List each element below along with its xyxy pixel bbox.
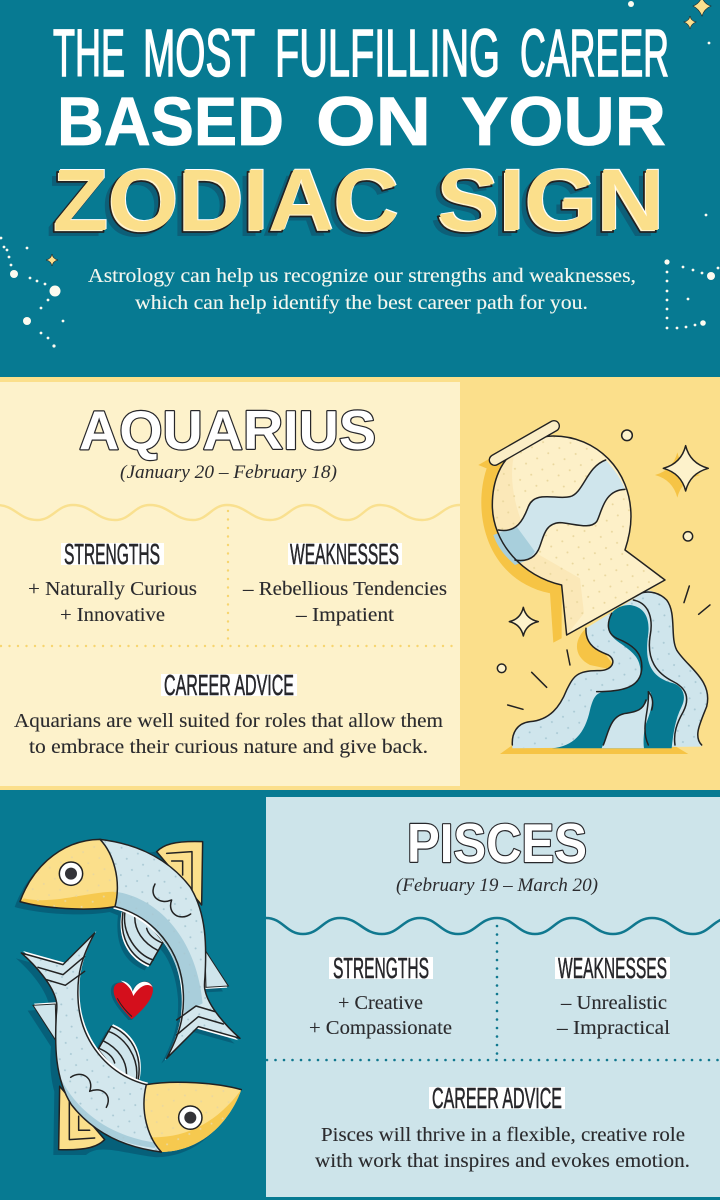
title line 3: ZODIAC <box>51 154 397 251</box>
constellation: left <box>0 237 64 348</box>
pisces dates: (February 19 – March 20) <box>396 875 598 896</box>
title line 3 <box>46 151 665 255</box>
pisces strengths: + Compassionate <box>309 1017 452 1039</box>
aquarius weaknesses: WEAKNESSES <box>290 539 399 571</box>
fish lower <box>21 931 241 1152</box>
aquarius career advice <box>14 670 443 758</box>
intro text: Astrology can help us recognize our strengths and weaknesses, <box>88 265 636 287</box>
title line 2: ON <box>316 83 431 160</box>
aquarius career advice: to embrace their curious nature and give back. <box>29 736 428 758</box>
intro text <box>88 265 636 314</box>
title line 1: MOST <box>143 16 255 91</box>
title line 1: THE <box>53 16 125 91</box>
title <box>46 16 669 255</box>
title line 1 <box>53 16 669 91</box>
aquarius weaknesses: – Impatient <box>295 604 394 626</box>
aquarius strengths: + Innovative <box>60 604 165 626</box>
aquarius heading: AQUARIUS <box>79 399 376 461</box>
pisces weaknesses: – Impractical <box>556 1017 670 1039</box>
pisces strengths: + Creative <box>338 992 423 1014</box>
title line 1: FULFILLING <box>275 16 500 91</box>
aquarius heading: AQUARIUS <box>79 399 376 461</box>
pisces career advice: Pisces will thrive in a flexible, creative role <box>321 1124 685 1146</box>
pisces career advice: with work that inspires and evokes emotion. <box>315 1150 690 1172</box>
aquarius strengths: + Naturally Curious <box>28 578 197 600</box>
aquarius dates: (January 20 – February 18) <box>120 462 337 483</box>
pisces strengths <box>309 953 452 1039</box>
pisces heading: PISCES <box>407 812 587 874</box>
aquarius weaknesses: – Rebellious Tendencies <box>242 578 447 600</box>
title line 3: ZODIAC <box>53 152 399 249</box>
title line 3: ZODIAC <box>46 158 392 255</box>
fish upper <box>20 839 240 1060</box>
intro text: which can help identify the best career path for you. <box>135 292 588 314</box>
aquarius career advice: CAREER ADVICE <box>164 670 294 702</box>
title line 2 <box>57 83 666 160</box>
pisces strengths: STRENGTHS <box>333 953 429 985</box>
icon: water jar pouring <box>478 426 710 754</box>
title line 3: SIGN <box>438 151 665 248</box>
title line 3: SIGN <box>430 158 657 255</box>
aquarius strengths: STRENGTHS <box>64 539 160 571</box>
panel: pisces background <box>0 790 720 1200</box>
title line 3: ZODIAC <box>54 151 400 248</box>
aquarius text background <box>0 382 460 786</box>
pisces weaknesses: – Unrealistic <box>560 992 667 1014</box>
header background <box>0 0 720 377</box>
aquarius career advice: Aquarians are well suited for roles that allow them <box>14 710 443 732</box>
aquarius strengths <box>28 539 197 626</box>
pisces heading: PISCES <box>407 812 587 874</box>
icon: two fish and heart <box>15 839 241 1157</box>
pisces career advice <box>315 1083 690 1172</box>
title line 3: SIGN <box>437 152 664 249</box>
aquarius weaknesses <box>242 539 447 626</box>
panel: aquarius <box>0 382 460 786</box>
panel: aquarius illustration background <box>0 377 720 790</box>
title line 2: BASED <box>57 83 284 160</box>
panel: pisces <box>266 797 720 1197</box>
heart <box>111 981 153 1020</box>
constellation: right <box>628 0 719 329</box>
pisces career advice: CAREER ADVICE <box>432 1083 562 1115</box>
pisces weaknesses <box>555 953 670 1039</box>
title line 2: YOUR <box>461 83 666 160</box>
pisces text background <box>266 797 720 1197</box>
fish shadows <box>15 845 236 1157</box>
title line 3: SIGN <box>435 154 662 251</box>
